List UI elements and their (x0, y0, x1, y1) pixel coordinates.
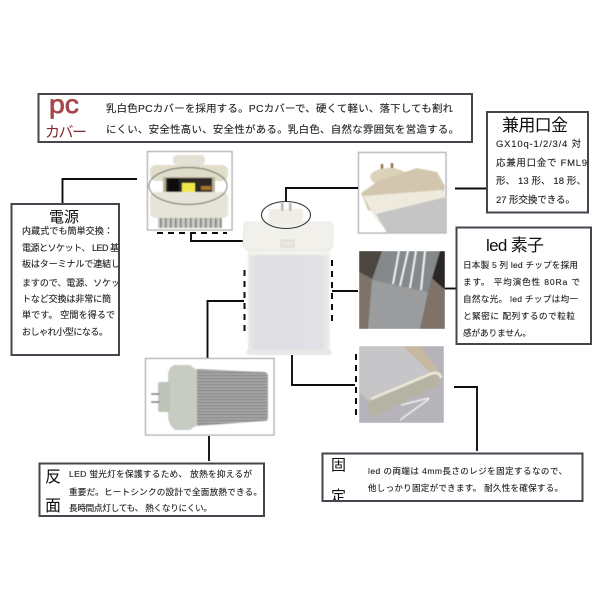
text: rear description: 重要だ。ヒートシンクの設計で全面放熱できる。 (69, 486, 262, 497)
heading: rear (45, 469, 61, 515)
text: pc cover description: にくい、安全性高い、安全性がある。乳白色、自然な雰囲気を営造する。 (106, 123, 459, 136)
text: fixing description: led の両端は 4mm長さのレジを固定するなので、 (368, 466, 567, 476)
panel: led chip (456, 228, 591, 344)
text: fixing description (368, 466, 567, 493)
text: universal base description: 形、 13 形、 18 形、 (496, 175, 586, 187)
text: power description: おしゃれ小型になる。 (22, 327, 108, 337)
connector: lamp base to photo (286, 188, 358, 202)
panel: universal base (487, 112, 588, 212)
text: power description: 板はターミナルで連結し (22, 258, 120, 269)
dashed marker: lamp right (331, 260, 333, 324)
heading: fixing (332, 458, 345, 500)
connector: lamp to led photo (332, 290, 358, 292)
text: power description (22, 225, 120, 337)
heading: fixing: 固 (331, 457, 346, 474)
text: rear description: 長時間点灯しても、 熱くなりにくい。 (69, 502, 212, 513)
photo: universal base (358, 152, 446, 233)
connector: led photo to panel (445, 288, 458, 290)
text: rear description (69, 468, 262, 513)
connector: photo to universal base (455, 188, 487, 190)
callout ellipse: lamp base (262, 202, 310, 228)
heading: pc: pc (49, 89, 79, 119)
dashed marker: fixing photo (355, 354, 357, 418)
text: led chip description: 日本製 5 列 led チップを採用 (463, 259, 578, 270)
text: led chip description (463, 259, 580, 338)
text: power description: ますので、電源、ソケッ (22, 278, 120, 288)
text: led chip description: 自然な光。 led チップは均一 (463, 293, 578, 304)
panel: rear (40, 464, 264, 516)
text: power description: 内蔵式でも簡単交換： (22, 225, 113, 236)
text: power description: 単です。 空間を得るで (22, 309, 115, 320)
connector: rear photo to panel (208, 436, 210, 461)
text: power description: 電源とソケット、 LED 基 (22, 242, 119, 253)
connector: power module to lamp (191, 233, 243, 241)
photo: power module (148, 152, 232, 230)
photo: rear heat sink (146, 358, 274, 435)
heading: rear: 反 (45, 469, 61, 486)
heading: universal base: 兼用口金 (502, 116, 568, 135)
connector: power (62, 179, 137, 204)
panel: fixing (322, 454, 582, 505)
photo: led chips (359, 251, 445, 329)
text: led chip description: ます。 平均演色性 80Ra で (463, 276, 580, 287)
text: pc cover description: 乳白色PCカバーを採用する。PCカバーで、硬くて軽い、落下しても割れ (106, 102, 454, 115)
connector: fixing photo to panel (454, 387, 477, 451)
heading: power: 電源 (49, 209, 79, 226)
connector: lamp to rear photo (208, 301, 244, 358)
lamp: front view (243, 203, 333, 355)
text: universal base description: GX10q-1/2/3/4 対 (496, 138, 581, 150)
text: universal base description (496, 138, 587, 206)
heading: led chip: led 素子 (486, 236, 544, 255)
text: pc cover description (106, 102, 459, 136)
connector: lamp to fixing photo (292, 355, 355, 385)
heading: fixing: 定 (331, 488, 346, 505)
text: led chip description: と緊密に 配列するので粒粒 (463, 310, 575, 321)
heading: cover: カバー (45, 124, 87, 141)
text: rear description: LED 蛍光灯を保護するため、 放熱を抑えるが (69, 468, 252, 479)
dashed marker: power module (157, 232, 227, 234)
panel: pc cover (38, 89, 472, 142)
text: led chip description: 感がありません。 (463, 327, 531, 338)
panel: power (12, 204, 120, 355)
text: fixing description: 他しっかり固定ができます。 耐久性を確保する。 (368, 483, 563, 493)
text: universal base description: 27 形交換できる。 (496, 194, 575, 206)
text: power description: トなど交換は非常に簡 (22, 293, 111, 304)
dashed marker: lamp left (244, 270, 246, 334)
heading: rear: 面 (45, 498, 61, 515)
photo: fixing end (359, 346, 444, 423)
text: universal base description: 応兼用口金で FML9 (496, 157, 587, 169)
